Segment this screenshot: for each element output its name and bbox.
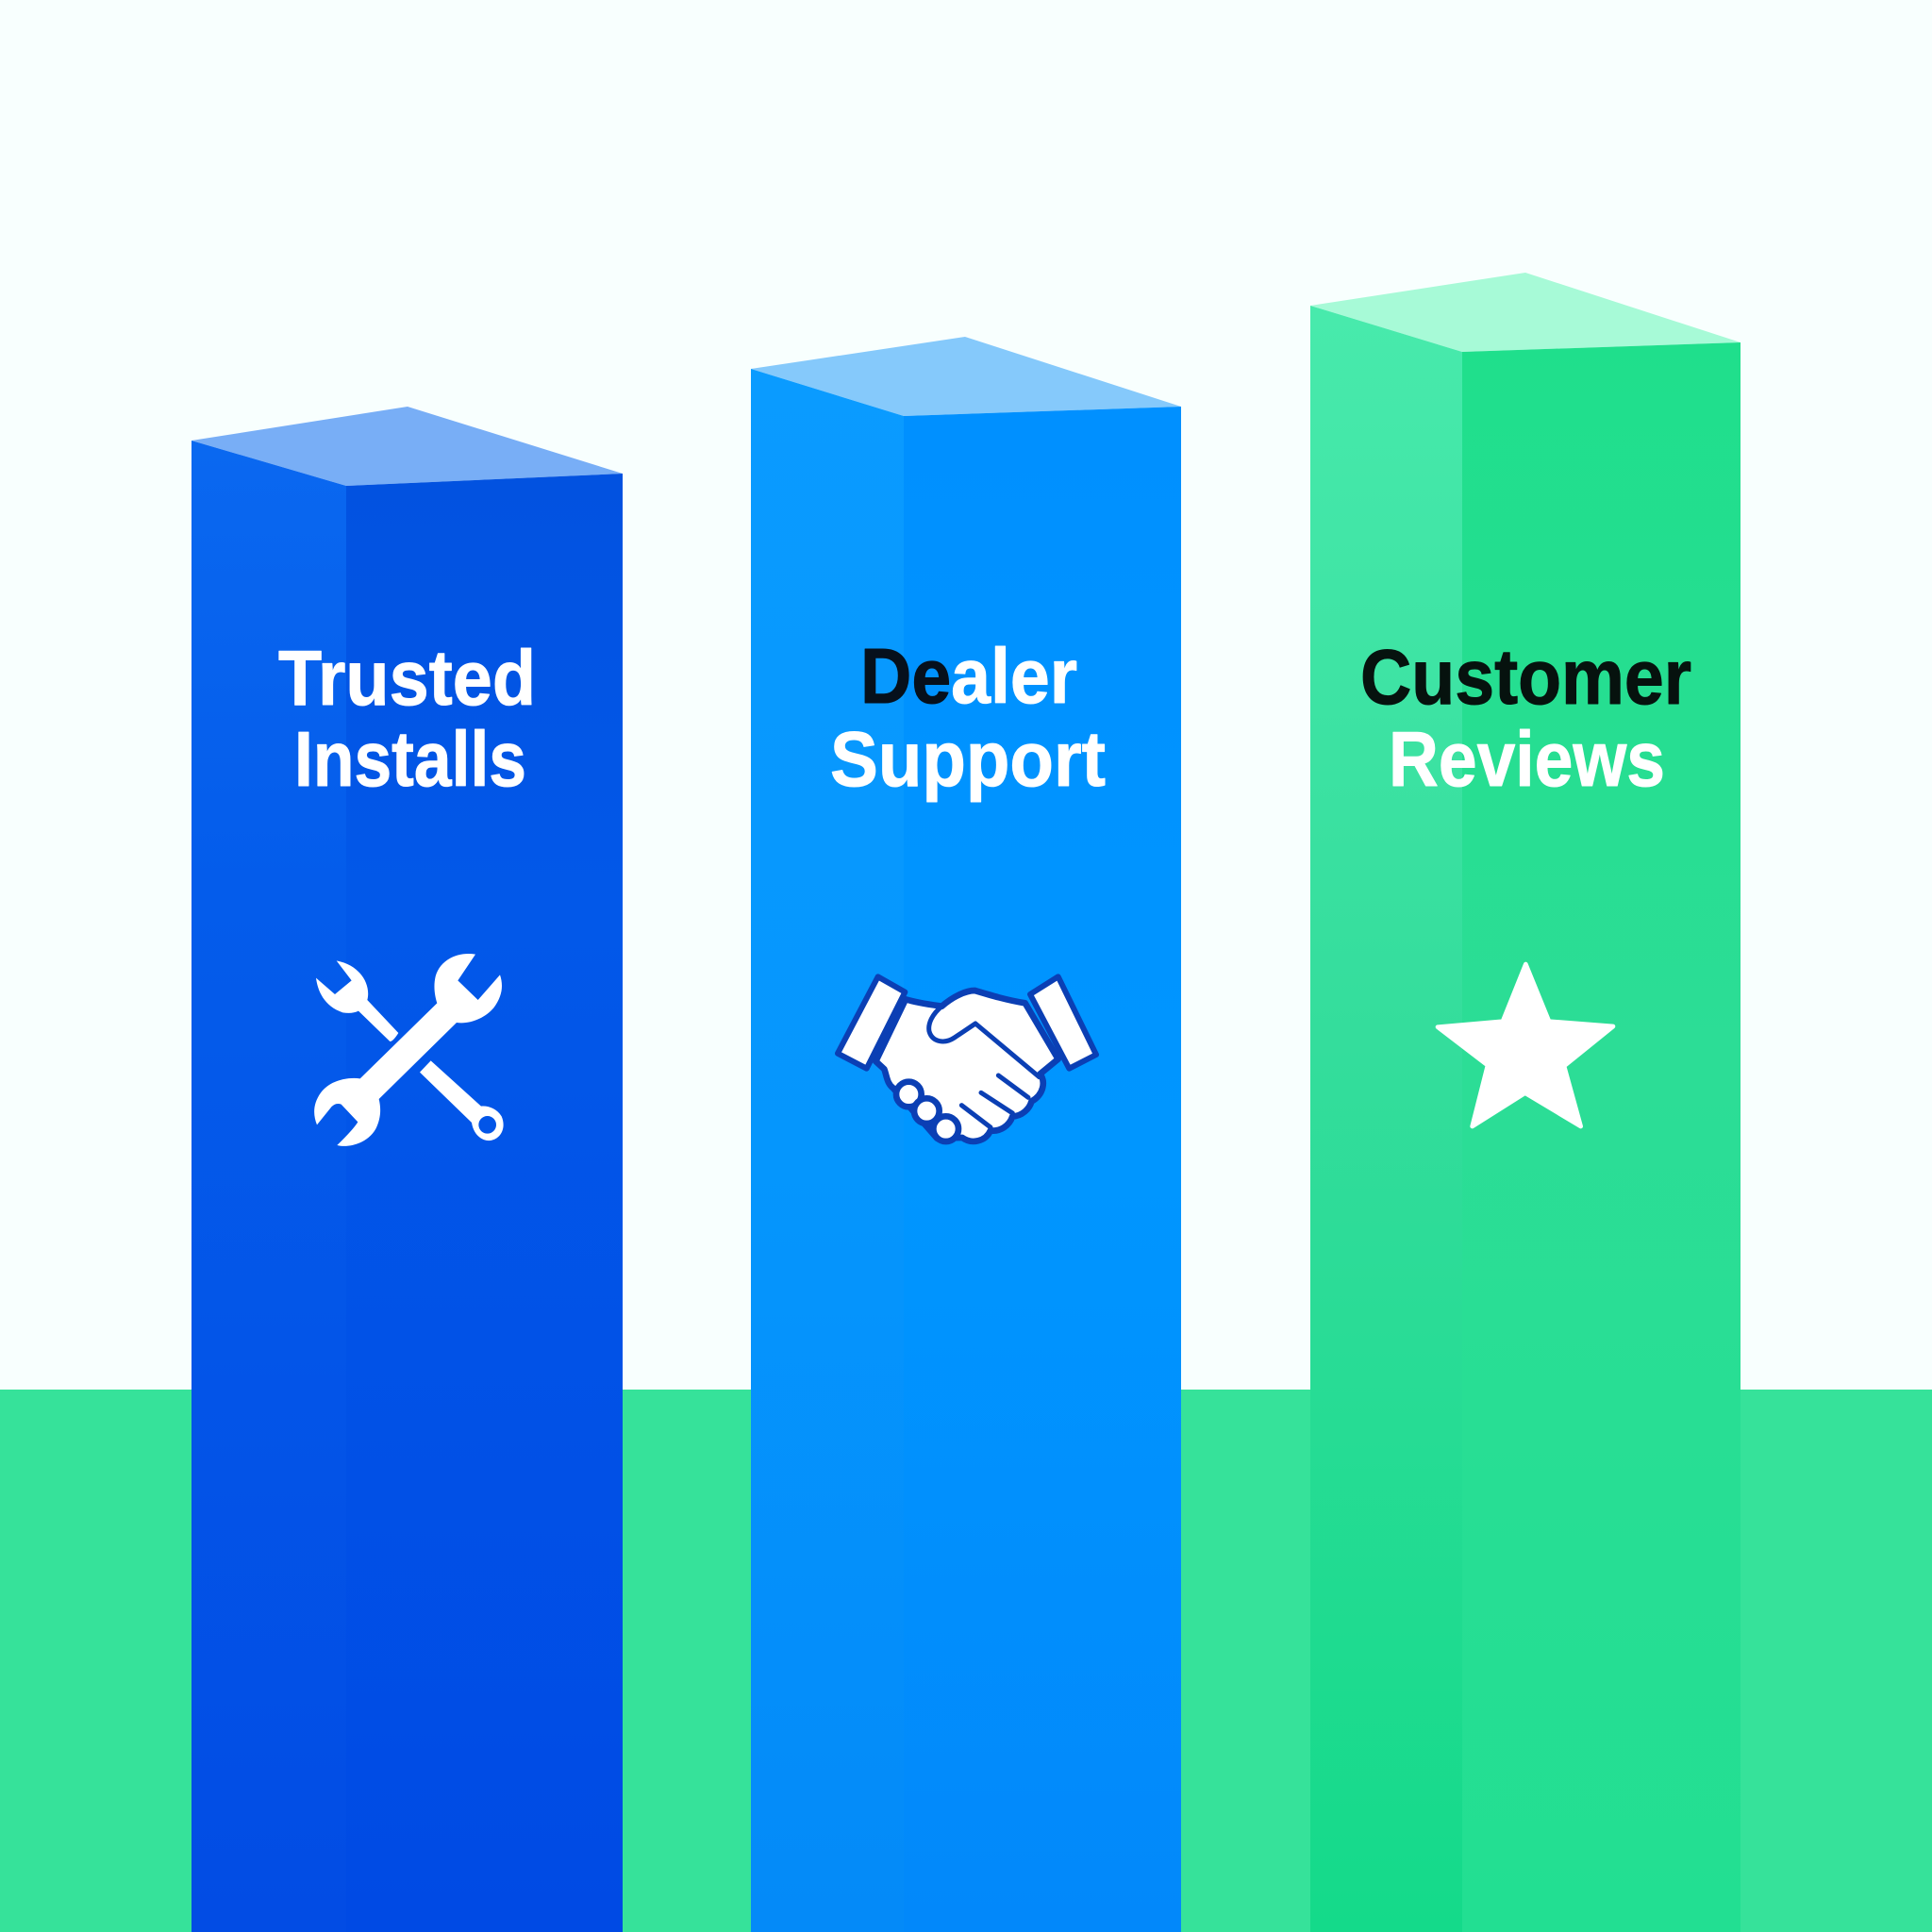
heading: Customer Reviews	[1360, 633, 1691, 803]
heading: Trusted Installs: Trusted	[278, 634, 536, 722]
column: Dealer Support	[751, 337, 1181, 1932]
heading: Trusted Installs	[278, 634, 536, 803]
background	[0, 0, 1932, 1390]
left face: Dealer Support column	[751, 369, 904, 1932]
heading: Trusted Installs: Installs	[294, 715, 526, 803]
left face: Customer Reviews column	[1310, 306, 1462, 1932]
right face: Customer Reviews column	[1462, 342, 1740, 1932]
right face: Dealer Support column	[904, 407, 1181, 1932]
column: Customer Reviews	[1310, 273, 1740, 1932]
heading: Dealer Support: Support	[830, 715, 1106, 803]
icon: crossed wrenches	[314, 954, 504, 1146]
heading: Dealer Support	[830, 632, 1106, 803]
top face: Customer Reviews column	[1310, 273, 1740, 352]
right face: Trusted Installs column	[346, 474, 623, 1932]
ground band	[0, 1390, 1932, 1932]
column: Trusted Installs	[192, 407, 623, 1932]
left face: Trusted Installs column	[192, 441, 346, 1932]
icon: star	[1438, 964, 1613, 1126]
heading: Customer Reviews: Customer	[1360, 633, 1691, 721]
icon: handshake	[838, 976, 1096, 1141]
heading: Customer Reviews: Reviews	[1389, 715, 1665, 803]
top face: Trusted Installs column	[192, 407, 623, 486]
top face: Dealer Support column	[751, 337, 1181, 416]
heading: Dealer Support: Dealer	[860, 632, 1077, 720]
